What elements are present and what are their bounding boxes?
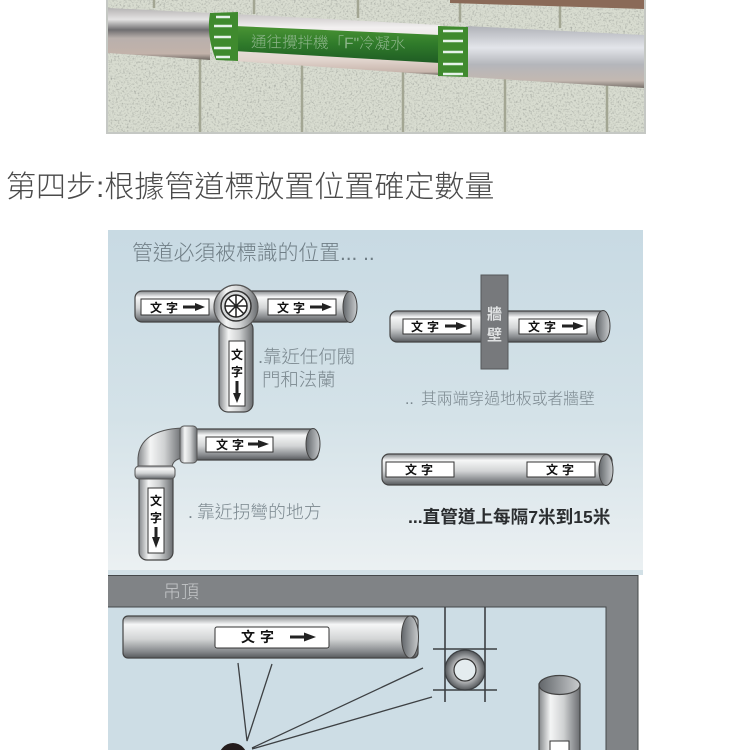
pipe diagram: straight run: 文字 xyxy=(546,462,578,477)
overhead pipe: 文字 xyxy=(241,629,279,645)
pipe diagram: through wall: 文字 xyxy=(528,319,560,334)
caption: every 7 to 15 metres: ...直管道上每隔7米到15米 xyxy=(408,507,611,527)
title: 第四步:根據管道標放置位置確定數量 xyxy=(6,171,494,204)
viewer head xyxy=(218,743,248,750)
silver pipe left xyxy=(108,8,210,60)
pipe diagram: bend: 文 xyxy=(150,493,162,508)
silver pipe middle xyxy=(234,14,440,75)
pipe diagram: through wall: 牆 xyxy=(487,306,502,323)
caption: through floor or wall: .. xyxy=(405,391,414,408)
pipe diagram: bend: 字 xyxy=(150,510,162,525)
pipe diagram: valve and flange: 文 xyxy=(231,347,243,362)
pipe diagram: valve and flange xyxy=(135,285,357,412)
photo overlay text: 通往攪拌機「F"冷凝水 xyxy=(251,33,406,53)
sight lines xyxy=(238,663,432,749)
pipe diagram: valve and flange: 字 xyxy=(231,364,243,379)
pipe diagram: valve and flange: 文字 xyxy=(150,300,182,315)
caption: through floor or wall: 其兩端穿過地板或者牆壁 xyxy=(421,390,595,408)
silver pipe right xyxy=(466,26,644,88)
upper brown pipe xyxy=(450,0,644,9)
green band xyxy=(234,26,440,63)
panel: where pipes must be marked xyxy=(108,230,643,575)
panel heading: 管道必須被標識的位置... .. xyxy=(132,242,375,265)
caption: near bends: . xyxy=(188,502,193,522)
caption: valve and flange, second line: 門和法蘭 xyxy=(262,369,336,390)
caption: near bends: 靠近拐彎的地方 xyxy=(197,502,321,522)
pipe diagram: straight run: 文字 xyxy=(405,462,437,477)
photo: green pipe marker on a wall xyxy=(106,0,646,134)
pipe diagram: through wall: 壁 xyxy=(487,326,502,344)
panel: sight lines below ceiling xyxy=(108,575,638,750)
overhead pipe xyxy=(123,616,418,658)
pipe diagram: through wall xyxy=(390,275,610,369)
ceiling label: 吊頂 xyxy=(163,582,199,602)
pipe diagram: straight run xyxy=(382,454,613,486)
pipe diagram: valve and flange: 文字 xyxy=(277,300,309,315)
pipe diagram: bend xyxy=(135,426,320,560)
caption: valve and flange: .靠近任何閥 xyxy=(258,346,355,367)
vertical riser pipe xyxy=(539,676,580,750)
pipe diagram: through wall: 文字 xyxy=(411,319,443,334)
pipe section in frame xyxy=(433,607,497,702)
pipe diagram: bend: 文字 xyxy=(216,437,248,452)
